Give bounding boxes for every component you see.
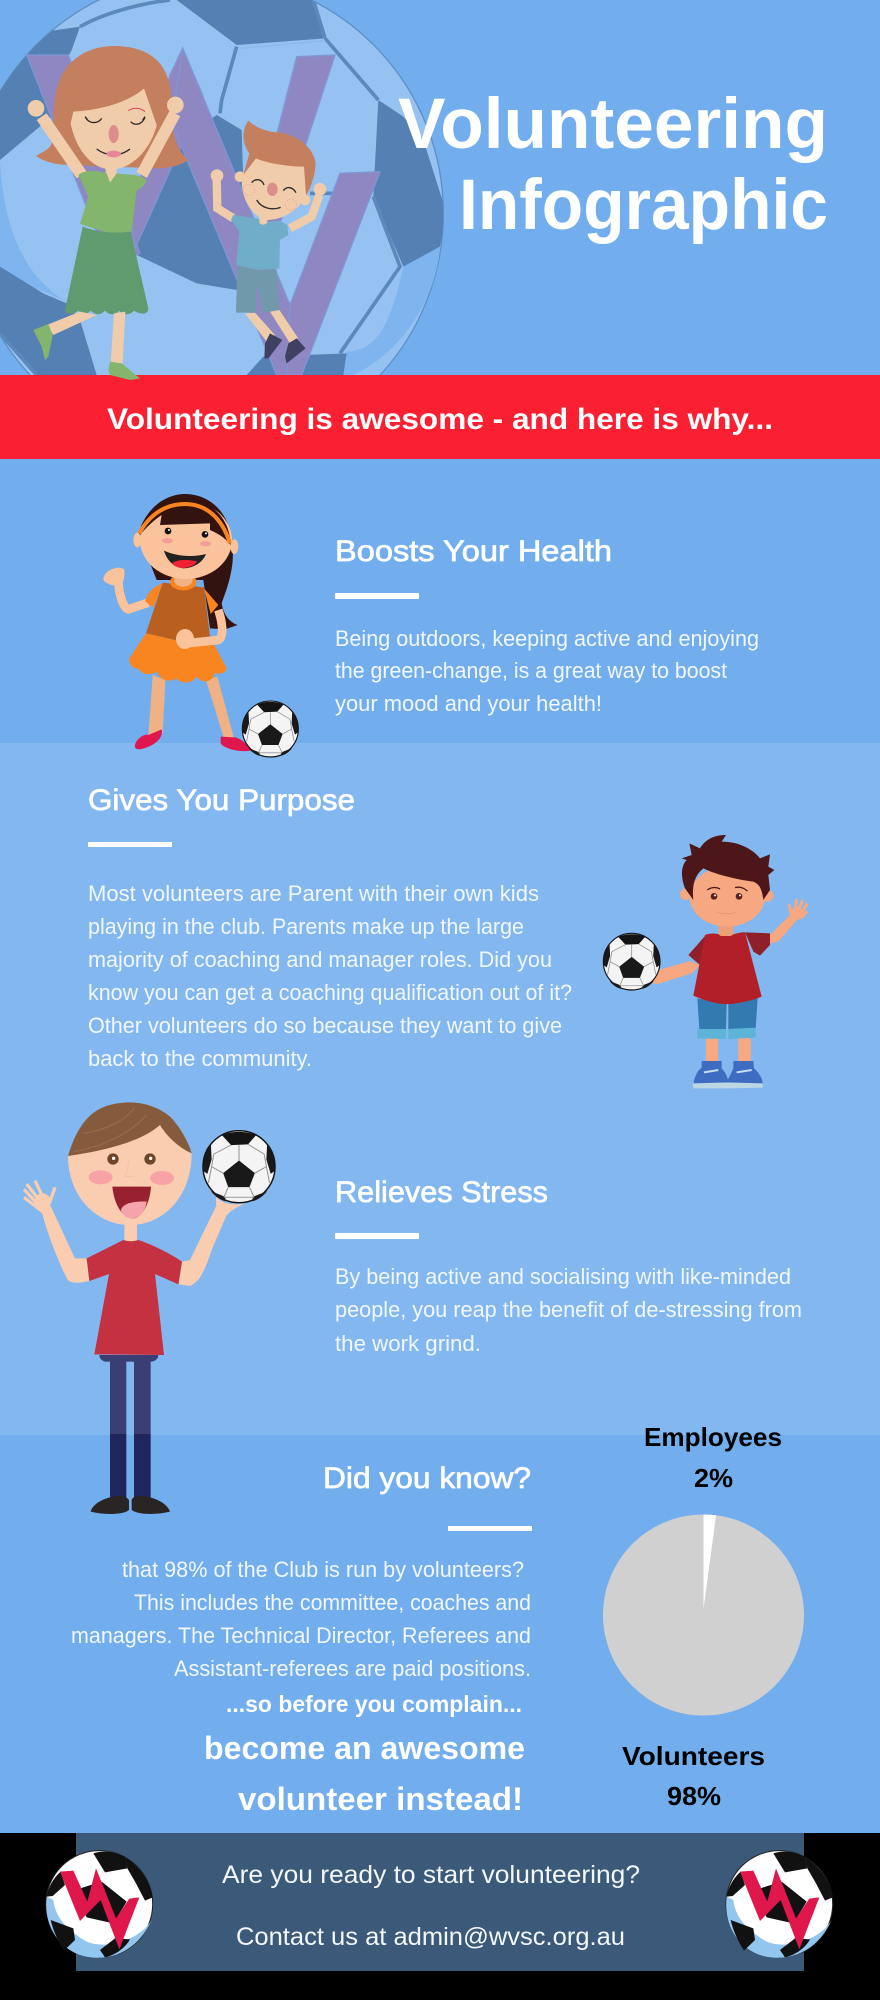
section: boosts your health text [335,535,759,716]
label: volunteers [622,1741,765,1811]
section: boosts your health text: Being outdoors, keeping active and enjoying [335,626,759,651]
section: relieves stress text: Relieves Stress [335,1176,548,1209]
section: did you know text: managers. The Technical Director, Referees and [71,1623,531,1648]
section: did you know text: This includes the committee, coaches and [134,1590,531,1615]
section: gives you purpose text: Gives You Purpose [88,784,355,817]
section: did you know text: ...so before you complain... [226,1691,522,1717]
section: gives you purpose text: Most volunteers are Parent with their own kids [88,881,539,906]
section: boosts your health text: the green-change, is a great way to boost [335,658,727,683]
section: boosts your health text: Boosts Your Health [335,535,612,568]
icon: right club logo [726,1851,833,1958]
section: gives you purpose text: playing in the club. Parents make up the large [88,914,524,939]
section: did you know text: that 98% of the Club is run by volunteers? [122,1557,524,1582]
label: employees: Employees [644,1422,782,1452]
section: gives you purpose text: majority of coaching and manager roles. Did you [88,947,552,972]
label: employees [644,1422,782,1493]
pie [603,1514,804,1716]
footer: Are you ready to start volunteering? [222,1861,640,1889]
label: employees: 2% [694,1463,733,1493]
section: gives you purpose text: know you can get a coaching qualification out of it? [88,980,572,1005]
title: Infographic [459,166,828,245]
section: did you know text: Assistant-referees are paid positions. [174,1656,531,1681]
section: gives you purpose text: back to the community. [88,1046,312,1071]
section: relieves stress text [335,1176,802,1356]
title: Volunteering [398,85,828,164]
illustration: girl with soccer ball [103,494,298,757]
panel: lighter section background [0,743,880,1435]
hero soccer ball with WV logo [0,0,444,375]
illustration: tall man with ball [24,1102,275,1514]
label: volunteers: 98% [667,1781,721,1811]
footer: Contact us at admin@wvsc.org.au [236,1923,625,1951]
section: relieves stress text: people, you reap the benefit of de-stressing from [335,1297,802,1322]
footer [0,1833,880,2000]
section: relieves stress text: the work grind. [335,1331,481,1356]
illustration: boy in red shirt with ball [603,835,807,1088]
red banner: Volunteering is awesome - and here is why... [107,403,773,436]
section: gives you purpose text [88,784,572,1071]
title [398,85,828,245]
section: did you know text: volunteer instead! [238,1781,523,1817]
pie chart: volunteers vs employees [603,1422,804,1811]
section: gives you purpose text: Other volunteers do so because they want to give [88,1013,562,1038]
section: relieves stress text: By being active and socialising with like-minded [335,1264,791,1289]
section: did you know text: Did you know? [323,1462,531,1495]
icon: left club logo [46,1851,153,1958]
illustration: boy jumping [211,121,326,363]
illustration: mother jumping [28,46,188,380]
section: did you know text: become an awesome [204,1730,525,1766]
section: boosts your health text: your mood and your health! [335,691,602,716]
label: volunteers: Volunteers [622,1741,765,1771]
red banner [0,375,880,459]
section: did you know text [71,1462,532,1817]
